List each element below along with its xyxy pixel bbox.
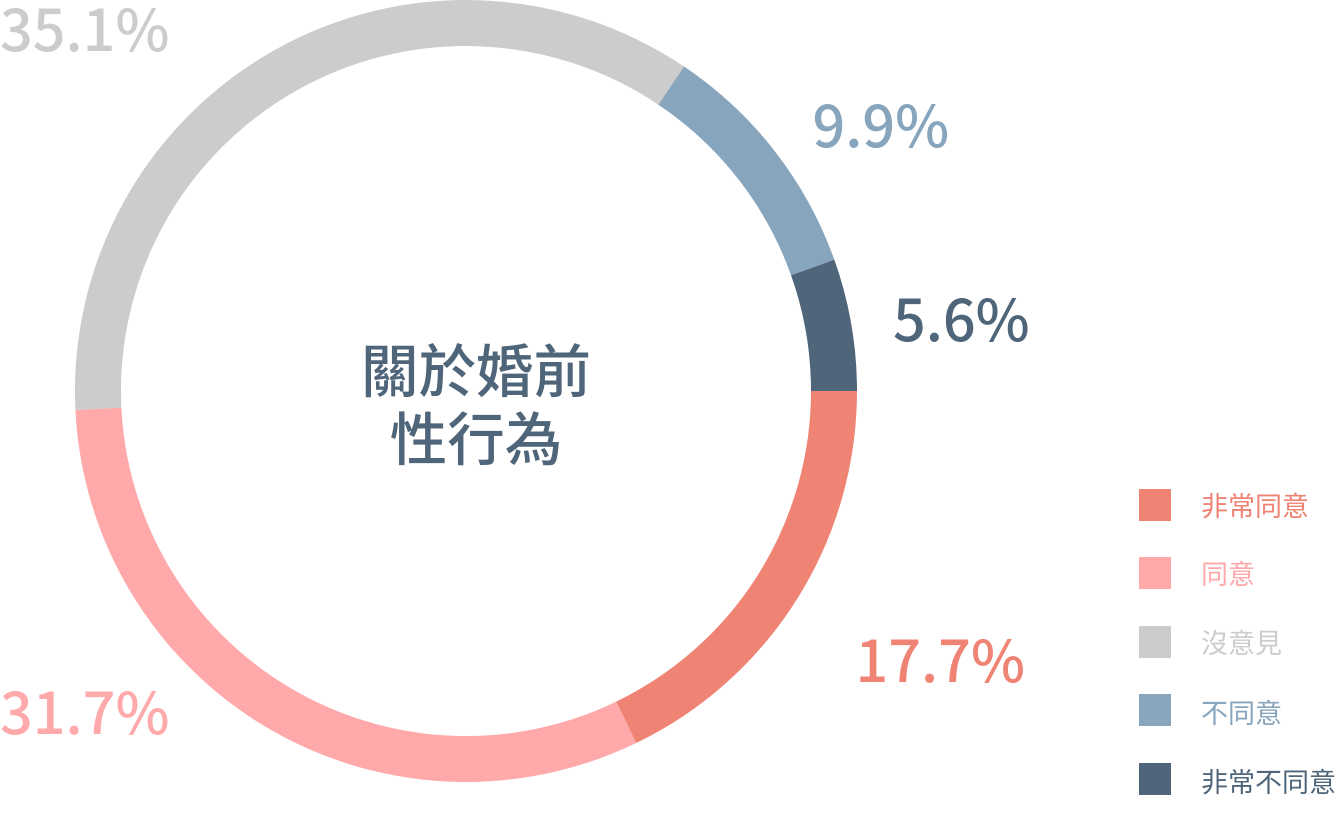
legend item: strongly disagree: 非常不同意	[1201, 761, 1336, 800]
segment: strongly agree 17.7%	[626, 391, 834, 722]
segment: disagree 9.9%	[671, 86, 813, 267]
legend item: no opinion: 沒意見	[1201, 622, 1282, 661]
legend item: no opinion	[1139, 622, 1282, 661]
label: 17.7%: 17.7%	[856, 615, 1025, 699]
center title: 性行為	[390, 393, 562, 477]
segment: no opinion 35.1%	[98, 23, 671, 409]
legend item: agree	[1139, 553, 1255, 592]
label: 31.7%: 31.7%	[0, 667, 169, 751]
legend item: disagree	[1139, 692, 1282, 731]
label: 5.6%: 5.6%	[893, 274, 1030, 358]
legend item: strongly agree	[1139, 485, 1309, 524]
label: 9.9%: 9.9%	[812, 80, 949, 164]
legend item: agree: 同意	[1201, 553, 1255, 592]
center title	[361, 325, 591, 477]
legend	[1139, 485, 1336, 800]
donut chart	[98, 23, 834, 759]
center title: 關於婚前	[361, 325, 591, 409]
segment: strongly disagree 5.6%	[813, 268, 834, 391]
legend item: strongly agree: 非常同意	[1201, 485, 1309, 524]
segment: agree 31.7%	[98, 409, 626, 759]
legend item: strongly disagree	[1139, 761, 1336, 800]
legend item: disagree: 不同意	[1201, 692, 1282, 731]
